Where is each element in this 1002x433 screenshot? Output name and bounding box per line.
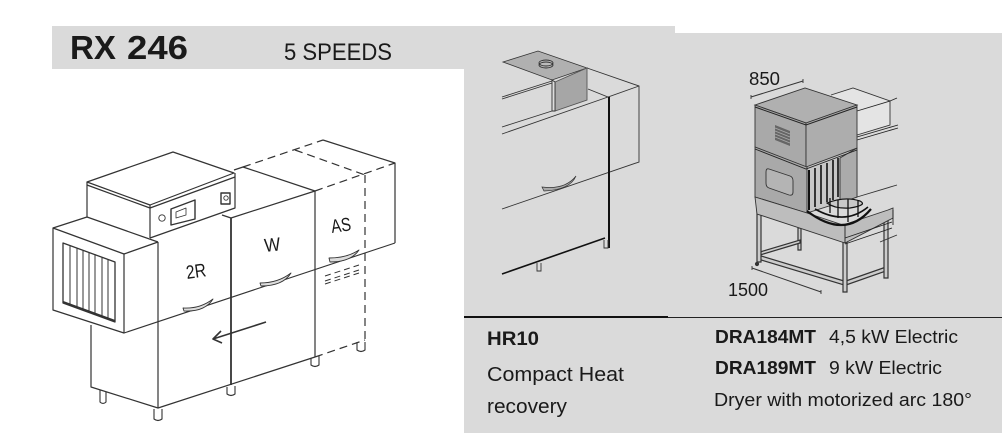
machine section labels bbox=[185, 214, 353, 284]
divider line bbox=[464, 316, 1002, 318]
icon: machine body bbox=[91, 167, 395, 408]
illustration: RX 246 dishwasher bbox=[53, 140, 395, 420]
text block: dryer options: 9 kW Electric bbox=[829, 358, 942, 378]
dimension 850 bbox=[749, 69, 803, 99]
text block: dryer options: DRA184MT bbox=[715, 327, 816, 347]
text block: dryer options bbox=[714, 327, 972, 410]
icon: hood with window bbox=[53, 217, 158, 333]
machine section labels: W bbox=[263, 234, 281, 257]
title: 246 bbox=[127, 29, 188, 66]
illustration: HR10 heat recovery bbox=[502, 51, 639, 274]
icon: control box bbox=[87, 152, 235, 238]
icon: door handles bbox=[183, 250, 359, 311]
conveyor section behind bbox=[831, 88, 890, 135]
text block: HR10: HR10 bbox=[487, 329, 539, 350]
stand legs bbox=[756, 197, 888, 292]
arrow: wash direction bbox=[213, 322, 266, 343]
dimension 850: 850 bbox=[749, 69, 780, 89]
dimension 1500: 1500 bbox=[728, 280, 768, 300]
title bbox=[70, 29, 188, 66]
dimension 1500 bbox=[728, 266, 821, 300]
text block: HR10: recovery bbox=[487, 396, 567, 418]
text block: HR10: Compact Heat bbox=[487, 364, 624, 386]
rotating table bbox=[755, 185, 897, 244]
text block: dryer options: DRA189MT bbox=[715, 358, 816, 378]
subtitle: 5 SPEEDS bbox=[284, 39, 392, 66]
machine section labels: 2R bbox=[185, 260, 208, 284]
icon: optional AS module dashed bbox=[243, 140, 395, 357]
icon: feet bbox=[100, 342, 365, 420]
illustration: dryer bbox=[728, 69, 898, 300]
dryer tower bbox=[755, 88, 857, 213]
machine section labels: AS bbox=[330, 214, 353, 238]
title: RX bbox=[70, 29, 116, 66]
text block: dryer options: 4,5 kW Electric bbox=[829, 327, 958, 347]
text block: dryer options: Dryer with motorized arc 180° bbox=[714, 390, 972, 410]
text block: HR10 bbox=[487, 329, 624, 418]
